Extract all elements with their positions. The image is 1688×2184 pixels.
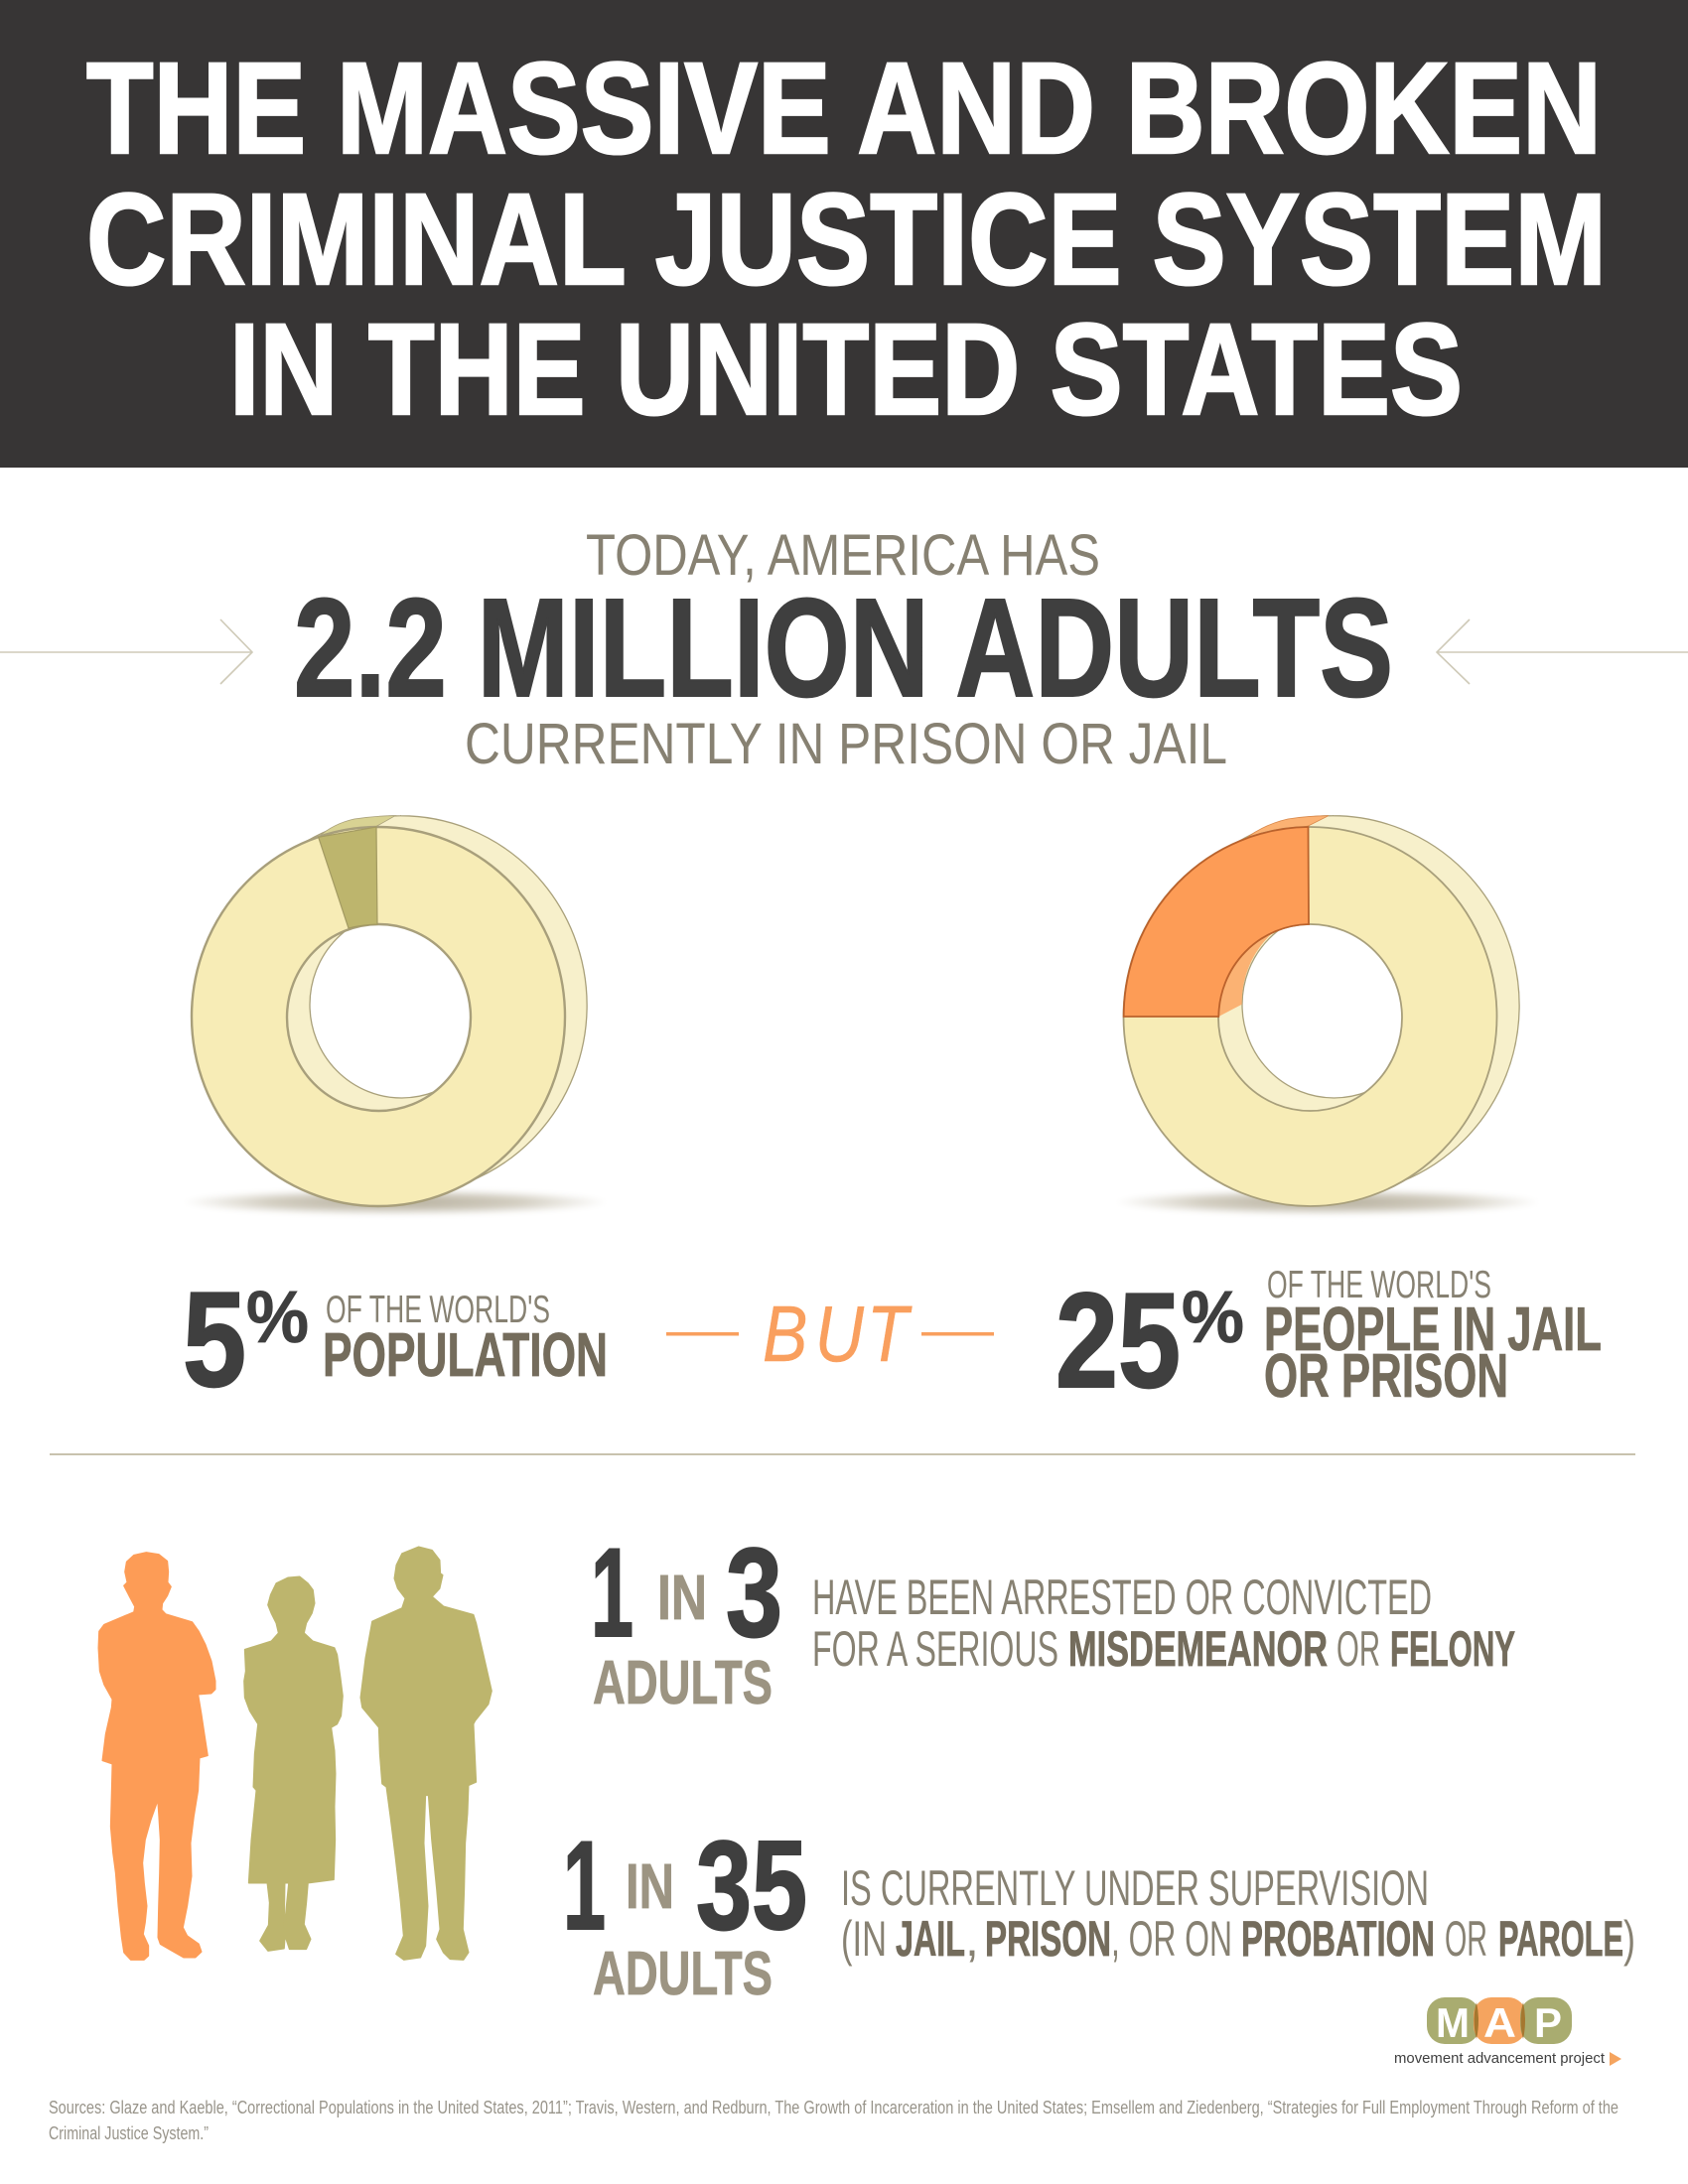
stat: 1 in 35 adults: 35	[696, 1815, 807, 1956]
stat: 5 percent: 5	[183, 1264, 246, 1415]
stat: 5 percent	[183, 1264, 608, 1415]
stat: 25 percent	[1055, 1264, 1602, 1416]
text block: arrested or convicted: OR	[1336, 1621, 1380, 1677]
stat: 1 in 35 adults: 1	[563, 1815, 606, 1956]
big number: 2.2 MILLION ADULTS	[294, 569, 1393, 726]
icon: orange man	[98, 1553, 215, 1960]
logo: movement advancement project: M	[1436, 1999, 1470, 2046]
stat: 25 percent: 25	[1055, 1265, 1181, 1416]
text block: under supervision: )	[1623, 1911, 1635, 1967]
stat: 25 percent: %	[1182, 1276, 1244, 1358]
stat: 5 percent: %	[246, 1276, 309, 1358]
text block: under supervision: PROBATION	[1241, 1911, 1435, 1967]
stat: 5 percent: OF THE WORLD'S	[326, 1289, 550, 1331]
stat: 25 percent: OF THE WORLD'S	[1267, 1264, 1491, 1306]
logo: movement advancement project: P	[1534, 1999, 1562, 2046]
title banner	[0, 0, 1688, 468]
stat: 1 in 3 adults: IN	[657, 1562, 707, 1633]
stat: 1 in 35 adults: IN	[626, 1850, 674, 1922]
stat: 1 in 3 adults	[591, 1522, 782, 1717]
stat: 1 in 3 adults: 1	[591, 1522, 633, 1663]
text block: under supervision: , OR ON	[1111, 1911, 1232, 1967]
sources footnote	[49, 2098, 1618, 2143]
sub line: CURRENTLY IN PRISON OR JAIL	[465, 712, 1227, 776]
stat: 25 percent: OR PRISON	[1264, 1342, 1508, 1411]
text block: arrested or convicted	[812, 1570, 1515, 1677]
text block: under supervision	[841, 1860, 1635, 1967]
icon: man in jacket	[360, 1547, 492, 1960]
stat: 1 in 3 adults: 3	[726, 1522, 782, 1663]
connector: but: BUT	[763, 1290, 913, 1378]
text block: arrested or convicted: MISDEMEANOR	[1068, 1621, 1328, 1677]
logo: movement advancement project: movement advancement project	[1394, 2050, 1606, 2067]
title banner: IN THE UNITED STATES	[229, 296, 1463, 442]
arrow: left	[0, 619, 252, 684]
icon: three silhouettes	[98, 1547, 492, 1960]
donut chart: 25 percent of people in jail or prison	[1114, 816, 1541, 1215]
headline statistic	[294, 523, 1393, 776]
intro line: TODAY, AMERICA HAS	[586, 523, 1100, 588]
text block: under supervision: PRISON	[985, 1911, 1111, 1967]
text block: arrested or convicted: FELONY	[1390, 1621, 1515, 1677]
arrow: right	[1437, 619, 1688, 684]
connector: but	[666, 1290, 994, 1378]
text block: under supervision: JAIL	[896, 1911, 965, 1967]
text block: under supervision: ,	[965, 1911, 979, 1967]
logo: movement advancement project	[1394, 1997, 1621, 2067]
icon: woman	[244, 1576, 343, 1951]
stat: 1 in 35 adults: ADULTS	[593, 1940, 773, 2008]
logo: movement advancement project: A	[1483, 1999, 1516, 2046]
stat: 5 percent: POPULATION	[323, 1321, 608, 1390]
stat: 1 in 3 adults: ADULTS	[593, 1649, 773, 1717]
text block: under supervision: (IN	[841, 1911, 887, 1967]
text block: under supervision: OR	[1445, 1911, 1487, 1967]
text block: arrested or convicted: FOR A SERIOUS	[812, 1621, 1058, 1677]
sources footnote: Criminal Justice System.”	[49, 2123, 209, 2143]
stat: 1 in 35 adults	[563, 1815, 807, 2008]
donut chart: 5 percent of world population	[182, 816, 609, 1215]
